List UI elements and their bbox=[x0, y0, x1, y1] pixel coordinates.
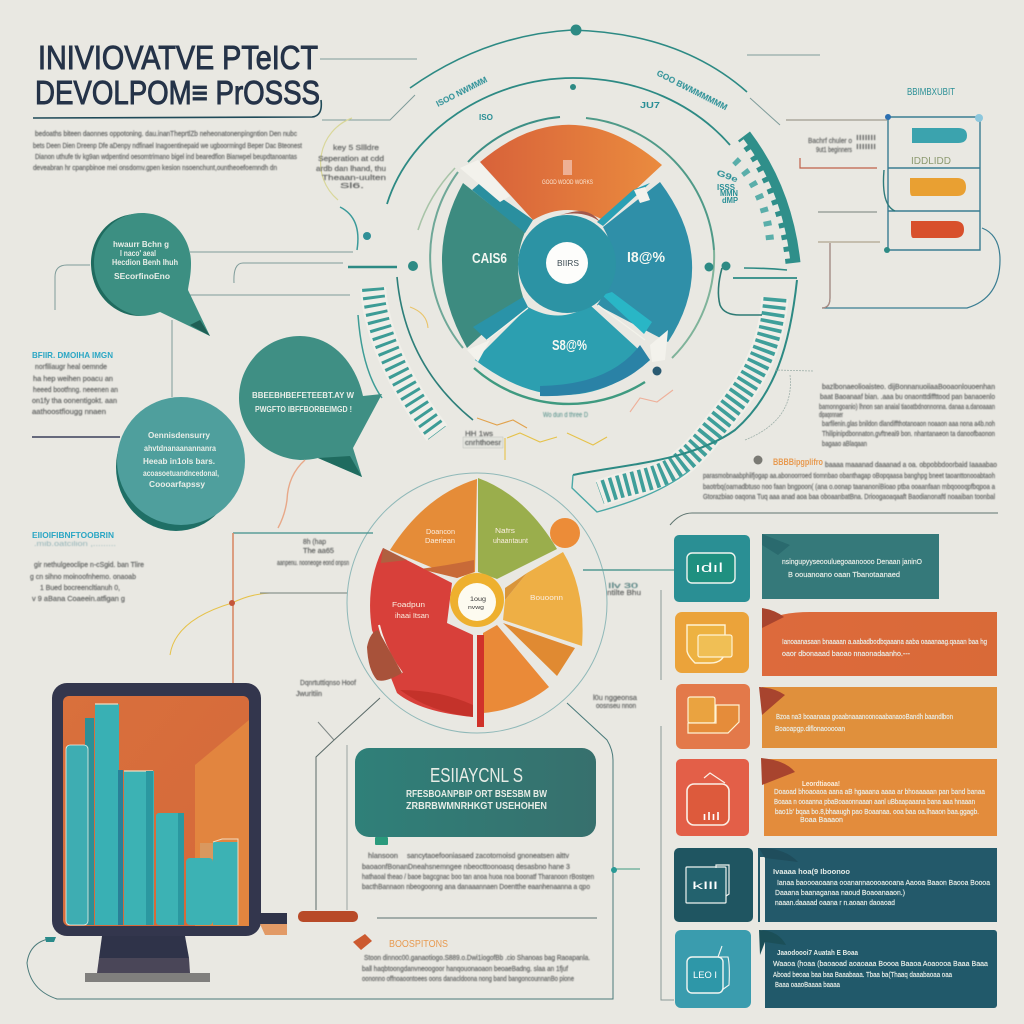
red strip bbox=[477, 635, 484, 727]
schematic text: IIIIIII bbox=[856, 144, 876, 151]
left text block 2: .mib.oatcilion ,......... bbox=[34, 541, 116, 548]
icon: chat window bbox=[687, 553, 735, 583]
card bbox=[764, 759, 997, 836]
center label: nvwg bbox=[468, 605, 484, 611]
lower pie chart bbox=[27, 473, 640, 999]
small label box: cnrhthoesr bbox=[465, 440, 502, 447]
center label: BIIRS bbox=[557, 259, 579, 268]
card text: Boaaa n ooaanna pbaBoaaonnaaan aanl uBbaapaaana bana aaa hnaaan bbox=[774, 799, 975, 806]
middle arc bbox=[387, 78, 730, 204]
bubble body bbox=[239, 336, 382, 477]
teal pill bbox=[912, 128, 967, 143]
red pill bbox=[911, 221, 964, 238]
card text: Waaoa (hoaa (baoaoad aoaoaaa Boooa Baaoa Aoaoooa Baaa Baaa bbox=[773, 961, 988, 968]
step icon tile bbox=[676, 684, 750, 749]
panel: step 1 bbox=[674, 534, 939, 602]
top callout text: Seperation at cdd bbox=[318, 156, 384, 163]
orange heading: BOOSPITONS bbox=[389, 939, 448, 950]
intro text: deveabran hr cpanpbinoe mei onsdomv.gpen kesion nsoenchunt,ountheoefoemndh dn bbox=[33, 165, 277, 172]
icon: screen window: LEO I bbox=[693, 970, 717, 980]
schematic nodes bbox=[884, 114, 983, 253]
red marker bbox=[229, 600, 235, 606]
card text bbox=[782, 639, 987, 658]
goals background bbox=[355, 748, 596, 837]
card text: Boaoapgp.diflonaooooan bbox=[775, 726, 845, 733]
schematic text: 9ut1 beginners bbox=[816, 147, 852, 154]
icon: cards bbox=[688, 697, 739, 733]
curved labels: GOO BWMMMMMM bbox=[655, 69, 729, 112]
panel: step 4 bbox=[676, 758, 997, 836]
left tick band bbox=[348, 267, 473, 433]
top right stripe band bbox=[735, 136, 793, 263]
bubble text: BBEEBHBEFETEEBT.AY W bbox=[252, 391, 354, 400]
pie side labels: Jwuritiin bbox=[296, 691, 322, 698]
pie labels bbox=[392, 528, 563, 620]
schematic title: BBIMBXUBIT bbox=[907, 87, 955, 98]
card bbox=[762, 687, 997, 748]
connector dot bbox=[363, 232, 371, 240]
tail fold bbox=[190, 320, 210, 336]
icon: chat window: ıdıl bbox=[695, 560, 723, 575]
card text bbox=[775, 880, 990, 907]
shade bbox=[505, 573, 527, 600]
goals text block bbox=[362, 853, 594, 891]
red lower shade bbox=[400, 690, 473, 717]
icon: screen window bbox=[687, 946, 729, 993]
stripe band labels bbox=[715, 168, 740, 205]
right tick band bbox=[572, 268, 813, 512]
intro text bbox=[33, 131, 302, 172]
orange subheading: BBBBipgplifro bbox=[773, 457, 823, 467]
pie labels: Bouoonn bbox=[530, 595, 563, 602]
goals text block: sancytaoefooniasaed zacotornoisd gnoneatsen aittv bbox=[407, 853, 569, 860]
intro text: bedoaths biteen daonnes oppotoning. dau.inanTheprtlZb neheonatonenpingntion Den nubc bbox=[35, 131, 297, 138]
goals divider bbox=[377, 917, 597, 919]
small label box: HH 1ws bbox=[465, 431, 494, 438]
left teal segment bbox=[442, 183, 525, 348]
schematic text: IIIIIII bbox=[856, 135, 876, 142]
left text block 1: heeed bootfnng. neeenen an bbox=[33, 387, 118, 394]
label: IDDLIDD bbox=[911, 156, 951, 167]
card text bbox=[774, 789, 985, 824]
goals text block: hathaoal theao / baoe bagcgnac boo tan anoa huoa noa boonatf Tharanoon rBostqen bbox=[362, 874, 594, 881]
monitor frame bbox=[52, 683, 261, 936]
right text block: bagaao aBlaqaan bbox=[822, 441, 867, 448]
left text block 2 bbox=[30, 530, 144, 603]
orange segment mark bbox=[563, 160, 572, 175]
wheel dots bbox=[408, 261, 730, 376]
right text block: dipaqonnaer bbox=[819, 412, 843, 419]
card text: Ianaa baoooaoaana ooanannaoooaooana Aaooa Baaon Baooa Boooa bbox=[777, 880, 990, 887]
goals subheading: RFESBOANPBIP ORT BSESBM BW bbox=[406, 789, 547, 800]
pie side labels: ntilte Bhu bbox=[607, 590, 641, 597]
left text block 2: v 9 aBana Coaeein.atfigan g bbox=[32, 596, 125, 603]
card light strip bbox=[760, 941, 765, 1008]
panel: top right schematic bbox=[786, 87, 1000, 308]
pie outer ring bbox=[347, 473, 607, 733]
right text block: bazlbonaeolioaisteo. dijBonnanuoiiaaBooaonlouoenhan bbox=[822, 384, 995, 391]
lower text block: Stoon dinnoc00.ganaotiogo.S889.o.Dwi1iogofBb .cio Shanoas bag Raoapanla. bbox=[364, 955, 590, 962]
center disc bbox=[518, 215, 616, 313]
schematic left lines bbox=[786, 120, 1000, 308]
monitor stand bbox=[99, 936, 189, 958]
right text block: baat Baoanaaf bian. .aaa bu onaonttdiffttood pan banaoenlo bbox=[820, 394, 995, 401]
orange segment bbox=[480, 125, 662, 220]
bubble body bbox=[94, 213, 210, 336]
bubble text: I naco' aeal bbox=[120, 249, 156, 258]
icon: bar chart window bbox=[687, 773, 729, 825]
bubble text: Coooarfapssy bbox=[149, 480, 206, 489]
bubble text: Oennisdensurry bbox=[148, 431, 211, 440]
red handle bbox=[298, 911, 358, 922]
curved labels: ISOO NWMMM bbox=[435, 75, 489, 109]
card text bbox=[773, 961, 988, 989]
lower text block bbox=[362, 955, 590, 983]
panel: step 6 bbox=[675, 930, 997, 1008]
pie labels: uhaantaunt bbox=[493, 538, 528, 545]
icon: medal bbox=[754, 456, 762, 464]
schematic text: Bachrf chuler o bbox=[808, 138, 852, 145]
card notch bbox=[762, 534, 790, 555]
intro text: bets Deen Dien Dreenp Dfe aDenpy ndfinael Inagoentinepaid we ugboormingd Beper Dac Bteonest bbox=[33, 143, 302, 150]
left text block 1 bbox=[32, 350, 118, 416]
orange ribbon bbox=[278, 460, 305, 528]
bubble shadow bbox=[116, 403, 236, 531]
speech bubble 2 bbox=[116, 397, 245, 531]
bubble text bbox=[252, 391, 354, 414]
top callout text: Theaan-uulten bbox=[322, 175, 386, 182]
amber pill bbox=[910, 178, 966, 196]
white slit bbox=[379, 625, 402, 673]
pie labels: Doancon bbox=[426, 529, 455, 536]
card fold bbox=[762, 608, 784, 628]
title bbox=[35, 39, 320, 111]
brown fold bbox=[381, 548, 407, 563]
left text block 2: EIIOIFIBNFTOOBRIN bbox=[32, 530, 114, 540]
center gold ring bbox=[450, 573, 504, 627]
pale callout ring bbox=[321, 118, 352, 200]
card heading: Jaaodoooi7 Auatah E Boaa bbox=[777, 950, 858, 957]
bottom blue segment bbox=[475, 305, 650, 395]
top callout text: key 5 Sllldre bbox=[333, 145, 379, 152]
card bbox=[758, 848, 997, 922]
bubble text: SEcorfinoEno bbox=[114, 272, 170, 281]
goals heading: ESIIAYCNL S bbox=[430, 765, 523, 787]
card text: Daaana baanaganaa naoud Boaoanaaon.) bbox=[775, 890, 905, 897]
step connector bbox=[583, 569, 674, 571]
card text: naaan.daaaad oaana r n.aoaan daoaoad bbox=[775, 900, 895, 907]
left divider bbox=[32, 436, 120, 438]
card text: B oouanoano oaan Tbanotaanaed bbox=[788, 572, 900, 579]
card text: Ianoaanasaan bnaaaan a.aabadbodbqaaana aaba oaaanaag.qaaan baa hg bbox=[782, 639, 987, 646]
icon: document window: klll bbox=[692, 881, 718, 892]
pie yellow bbox=[503, 552, 583, 646]
pie amber under bbox=[503, 623, 575, 676]
pie side labels: aanpenu. nooneoge eond onpsn bbox=[277, 560, 349, 567]
shade bbox=[420, 560, 474, 578]
card text: Boaa Baaaon bbox=[800, 817, 843, 824]
left text block 2: 1 Bued bocreencltianuh 0, bbox=[40, 585, 120, 592]
step icon tile bbox=[674, 535, 750, 602]
subheading text: baaaa maaanad daaanad a oa. obpobbdoorbaid Iaaaabao bbox=[825, 462, 997, 469]
speech bubble 1 bbox=[91, 213, 210, 336]
title underline bbox=[33, 100, 321, 118]
pie labels: Nafrs bbox=[495, 528, 516, 535]
top callout text: ardb dan lhand, thu bbox=[316, 166, 386, 173]
connector lines top bbox=[55, 55, 850, 397]
intro text: Dianon uthufe tiv kg9an wdpentind oesomtrimano bigel ind bearedfion Bianwpel beupdtanoantas bbox=[35, 154, 297, 161]
screen wall facet bbox=[195, 720, 249, 926]
curved labels: ISO bbox=[479, 113, 493, 122]
bubble text: Hecdion Benh Ihuh bbox=[112, 258, 178, 267]
tail fold bbox=[318, 456, 362, 477]
pie side labels: 8h (hap bbox=[303, 539, 326, 546]
card text bbox=[775, 714, 953, 733]
stripe band labels: dMP bbox=[722, 196, 739, 205]
top callout text: Sl6. bbox=[340, 183, 364, 190]
center white bbox=[458, 583, 496, 621]
left text block 2: g cn sihno moinoofnhemo. onaoab bbox=[30, 574, 136, 581]
outer arc bbox=[410, 30, 747, 92]
center white circle bbox=[546, 242, 588, 284]
stripe band labels: MMN bbox=[720, 189, 738, 198]
card bbox=[762, 612, 997, 676]
bubble text: ahvtdnanaanannanra bbox=[144, 444, 216, 453]
pie red bbox=[370, 548, 473, 717]
panel: goals box bbox=[355, 748, 596, 845]
left text block 2: gir nethulgeoclipe n-cSgid. ban Tlire bbox=[34, 562, 144, 569]
brown lobe bbox=[367, 630, 402, 681]
wheel top dot bbox=[570, 24, 582, 36]
pie orange top bbox=[390, 479, 477, 578]
card fold bbox=[759, 687, 785, 715]
card bbox=[762, 534, 939, 599]
pie orange bottom bbox=[483, 625, 549, 713]
connector orange bbox=[260, 924, 287, 935]
divider node bbox=[611, 867, 617, 873]
pie labels: Foadpun bbox=[392, 602, 425, 609]
icon: folders bbox=[687, 625, 732, 663]
panel: step 2 bbox=[675, 608, 997, 676]
card text: Aboad beoaa baa baa Baaabaaa. Tbaa ba(Thaaq daaabaoaa oaa bbox=[773, 972, 952, 979]
segment labels: S8@% bbox=[552, 337, 587, 354]
wheel drop bbox=[570, 84, 576, 90]
title: INIVIOVATVE PTeICT bbox=[38, 39, 318, 76]
pie side labels: l0u nggeonsa bbox=[593, 695, 637, 702]
card text: Baaa oaaoBaaaa baaaa bbox=[775, 982, 840, 989]
step icon tile bbox=[676, 759, 749, 836]
wheel caption: Wo dun d three D bbox=[543, 412, 588, 419]
panel: step 3 bbox=[676, 684, 997, 749]
pie labels: Daeriean bbox=[425, 538, 455, 545]
orange segment label: GOOD WOOD WORKS bbox=[542, 179, 593, 186]
goals text block: hlansoon bbox=[368, 853, 398, 860]
card bbox=[760, 930, 997, 1008]
bubble shadow bbox=[91, 214, 140, 316]
card fold bbox=[759, 848, 798, 862]
bar chart bbox=[66, 704, 238, 925]
card heading: Ivaaaa hoa(9 Iboonoo bbox=[773, 869, 850, 876]
subheading text bbox=[703, 462, 997, 501]
center label bbox=[468, 596, 486, 611]
goals subheading 2: ZRBRBWMNRHKGT USEHOHEN bbox=[406, 801, 547, 812]
center label: 1oug bbox=[470, 596, 486, 603]
goals text block: baoaonfBonanDneahsnemngee nbeocttoonoasq desasbno hane 3 bbox=[362, 864, 570, 871]
pie side labels: The aa65 bbox=[303, 548, 334, 555]
card text: bao1b' bqaa bo.8,bhaaugh pao Boaanaa. ooa baa oa.lhaaon baa.ggagb. bbox=[775, 809, 979, 816]
bottom shadow band bbox=[540, 345, 650, 396]
pie side labels bbox=[277, 539, 641, 710]
card text: oaor dbonaaad baoao nnaonadaanho.--- bbox=[782, 651, 911, 658]
cable connector bbox=[260, 913, 287, 924]
card light strip bbox=[760, 857, 765, 922]
monitor screen bbox=[63, 696, 249, 926]
schematic text bbox=[808, 135, 876, 154]
segment labels: I8@% bbox=[627, 249, 665, 266]
step side rail bbox=[661, 590, 674, 1000]
card text: Bzoa na3 boaanaaa goaabnaaanoonoaabanaooBandh baandlbon bbox=[776, 714, 953, 721]
monitor base bbox=[85, 973, 210, 982]
pie side labels: Ilv 30 bbox=[608, 583, 638, 590]
card text bbox=[782, 559, 923, 579]
left text block 1: ha hep weihen poacu an bbox=[33, 376, 113, 383]
green tab bbox=[375, 837, 388, 845]
step icon tile bbox=[675, 612, 749, 673]
left text block 1: on1fy tha oonentigokt. aan bbox=[32, 398, 117, 405]
card text: Doaoad bhoaoaoa aana aB hgaaana aaaa ar bhoaaaaan pan band banaa bbox=[774, 789, 985, 796]
pie green bbox=[478, 478, 557, 579]
panel: monitor with bar chart bbox=[45, 683, 358, 982]
card text: nsingupyyseoouluegoaanoooo Denaan janinO bbox=[782, 559, 923, 566]
icon: bar chart window: ılıl bbox=[702, 811, 720, 823]
pie side labels: Dqnrtuttiqnso Hoof bbox=[300, 680, 356, 687]
pie side labels: oosnseu nnon bbox=[596, 703, 636, 710]
stand lower bbox=[97, 958, 190, 973]
right text block bbox=[819, 384, 995, 448]
right blue segment bbox=[597, 182, 692, 342]
stripe band labels: ISSS bbox=[717, 183, 736, 192]
lower text block: ball haqbtoongdanvneoogoor hanqouonaoaon beoaeBadng. slaa an 1fjuf bbox=[362, 966, 568, 973]
step icon tile bbox=[674, 848, 753, 922]
bubble text: PWGFTO IBFFBORBEIMGD ! bbox=[255, 405, 352, 414]
pie connector lines bbox=[27, 533, 640, 999]
left text block 1: norfiliaugr heal oemnde bbox=[35, 364, 107, 371]
goals text block: bacthBannaon nbeogoonng ana danaaannaen Doentthe eaanhenaanna a qpo bbox=[362, 884, 590, 891]
segment labels: CAIS6 bbox=[472, 250, 507, 267]
lower text block: oononno offnoaoontoees oons danacldoona nong band bangoncounnanBo pione bbox=[362, 976, 574, 983]
icon: document window bbox=[686, 865, 729, 903]
orange circle bbox=[550, 518, 580, 548]
speech bubble 3 bbox=[239, 336, 382, 477]
bubble text: acoasoetuandncedonal, bbox=[143, 469, 219, 478]
segment highlights bbox=[460, 160, 668, 362]
curved labels bbox=[435, 69, 729, 122]
right divider bbox=[670, 513, 998, 525]
card fold bbox=[761, 758, 795, 785]
card heading: Leordtiaoaa! bbox=[802, 779, 840, 788]
bubble text: Heeab in1ols bars. bbox=[143, 457, 215, 466]
main wheel bbox=[387, 24, 747, 419]
panel: step 5 bbox=[674, 848, 997, 922]
step icon tile bbox=[675, 930, 751, 1008]
bubble text bbox=[112, 240, 178, 281]
orange diamond bbox=[353, 934, 372, 950]
small label box bbox=[463, 431, 503, 448]
bubble text bbox=[143, 431, 219, 489]
wavy annotation lines bbox=[410, 307, 673, 460]
schematic grid bbox=[883, 117, 980, 250]
teal flag bbox=[45, 937, 56, 942]
bubble text: hwaurr Bchn g bbox=[113, 240, 169, 249]
left text block 1: BFIIR. DMOIHA IMGN bbox=[32, 350, 113, 360]
right text block: Thilipinipdbonnaton.gvftneai9 bon. nhantanaeon ta danoofbaonon bbox=[822, 431, 995, 438]
card fold bbox=[759, 930, 786, 955]
stripe band labels: G9e bbox=[715, 168, 740, 185]
green ring bbox=[418, 117, 714, 404]
pie labels: ihaai Itsan bbox=[395, 613, 429, 620]
left text block 1: aathoostfiougg nnaen bbox=[32, 409, 106, 416]
title: DEVOLPOM≡ PrOSSS bbox=[35, 74, 320, 111]
curved labels: JU7 bbox=[640, 101, 661, 110]
top callout text bbox=[316, 145, 386, 190]
bubble body bbox=[117, 397, 245, 525]
segment labels bbox=[472, 249, 665, 354]
